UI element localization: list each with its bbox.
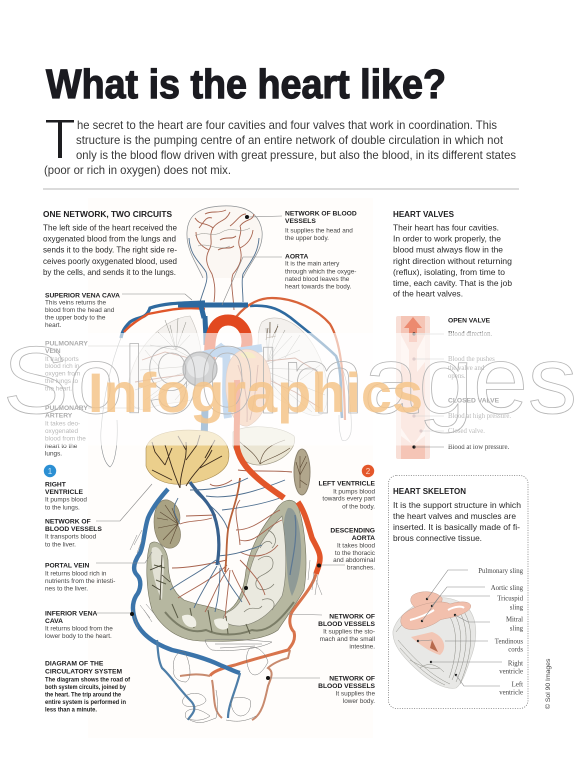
label: diagram of the circulatory system: CIRCULATORY SYSTEM xyxy=(45,668,122,676)
valve labels: OPEN VALVE xyxy=(448,318,491,324)
label: pulmonary vein: the lungs to xyxy=(45,378,78,385)
label: superior vena cava: heart. xyxy=(45,322,62,329)
label: network of blood vessels (liver): BLOOD VESSELS xyxy=(45,526,102,533)
label: pulmonary vein: PULMONARY xyxy=(45,340,88,348)
label: pulmonary vein: blood rich in xyxy=(45,363,80,370)
ascending vena cava xyxy=(200,410,205,480)
head vessel network xyxy=(187,206,262,310)
label: network of blood vessels (lower body): It supplies the xyxy=(336,690,375,698)
label: inferior vena cava: lower body to the heart. xyxy=(45,633,112,640)
label: diagram of the circulatory system xyxy=(45,660,131,714)
heart skeleton labels: ventricle xyxy=(499,668,523,676)
label: network of blood vessels (head): the upper body. xyxy=(285,235,329,242)
label: superior vena cava: blood from the head and xyxy=(45,307,115,314)
intro paragraph: structure is the pumping centre of an entire network of double circulation in which not xyxy=(76,133,504,147)
label: pulmonary artery: PULMONARY xyxy=(45,405,88,412)
panel: heart valves: Their heart has four cavities. xyxy=(393,222,499,232)
label: pulmonary artery: heart to the xyxy=(45,443,78,450)
label: right ventricle: VENTRICLE xyxy=(45,489,83,496)
label: diagram of the circulatory system: both system circuits, joined by xyxy=(45,684,126,691)
label: network of blood vessels (intestine): mach and the small xyxy=(320,636,375,643)
heart xyxy=(226,349,271,426)
panel: heart valves: right direction without returning xyxy=(393,256,512,266)
label: one network, two circuits: ONE NETWORK, TWO CIRCUITS xyxy=(43,209,172,219)
label: one network, two circuits: ceives poorly oxygenated blood, used xyxy=(43,256,177,266)
valve labels xyxy=(448,318,511,451)
valve labels: CLOSED VALVE xyxy=(448,398,500,404)
icon: number 2 badge: 2 xyxy=(366,467,371,476)
label: one network, two circuits: sends it to the body. The right side re- xyxy=(43,244,177,254)
label: descending aorta: to the thoracic xyxy=(335,550,376,557)
panel: heart skeleton: HEART SKELETON xyxy=(393,486,466,496)
panel: heart skeleton: the heart valves and muscles are xyxy=(393,511,516,521)
icon: number 1 badge xyxy=(44,465,56,477)
valve labels: Blood at high pressure. xyxy=(448,413,511,420)
label: diagram of the circulatory system: The diagram shows the road of xyxy=(45,676,131,684)
label: one network, two circuits: by the cells, and sends it to the lungs. xyxy=(43,267,176,277)
label: aorta: It is the main artery xyxy=(285,260,340,268)
intro paragraph: only is the blood flow driven with great pressure, but also the blood, in its different states xyxy=(76,148,516,162)
label: portal vein: PORTAL VEIN xyxy=(45,562,90,570)
small intestine loops xyxy=(224,516,286,626)
label: network of blood vessels (head) xyxy=(245,210,357,242)
valve labels: opens. xyxy=(448,373,466,380)
panel: heart valves: (reflux), isolating, from time to xyxy=(393,267,505,277)
label: left ventricle: of the body. xyxy=(342,504,375,510)
label: network of blood vessels (intestine): BLOOD VESSELS xyxy=(318,621,376,628)
label: network of blood vessels (intestine): It supplies the sto- xyxy=(323,628,375,636)
label: diagram of the circulatory system: less than a minute. xyxy=(45,706,97,714)
label: network of blood vessels (lower body): BLOOD VESSELS xyxy=(318,683,376,690)
superior vena cava and subclavian veins xyxy=(178,302,248,345)
label: descending aorta: AORTA xyxy=(352,535,375,542)
panel: heart valves: In order to work properly, the xyxy=(393,234,501,244)
mesenteric vessels xyxy=(170,470,292,618)
label: aorta: heart towards the body. xyxy=(285,284,352,290)
label: pulmonary artery: It takes deo- xyxy=(45,420,80,428)
label: left ventricle: towards every part xyxy=(322,496,375,502)
grey sphere: right atrium xyxy=(183,352,217,386)
label: descending aorta xyxy=(317,528,376,572)
heart skeleton drawing xyxy=(393,570,502,688)
label: superior vena cava: the upper body to the xyxy=(45,314,106,322)
label: aorta: through which the oxyge- xyxy=(285,268,356,276)
label: pulmonary vein: It transports xyxy=(45,356,79,363)
descending aorta xyxy=(237,380,284,498)
label: superior vena cava xyxy=(45,292,192,329)
heart skeleton labels: sling xyxy=(510,626,524,632)
kidney xyxy=(154,500,180,548)
label: right ventricle xyxy=(45,482,87,512)
valve labels: Blood at low pressure. xyxy=(448,444,509,451)
label: network of blood vessels (liver): It transports blood xyxy=(45,534,97,540)
icon: number 1 badge: 1 xyxy=(48,467,53,476)
heart skeleton labels: ventricle xyxy=(499,690,523,696)
label: network of blood vessels (intestine) xyxy=(244,586,376,650)
left lung xyxy=(128,316,205,410)
label: portal vein: nes to the liver. xyxy=(45,586,88,592)
icon: number 2 badge xyxy=(362,465,374,477)
arm vessels and hands xyxy=(101,298,351,467)
heart skeleton labels: Right xyxy=(508,660,523,668)
label: aorta: AORTA xyxy=(285,254,308,260)
label: network of blood vessels (lower body): NETWORK OF xyxy=(329,676,375,682)
panel: heart valves: blood must always flow in the xyxy=(393,244,503,254)
label: descending aorta: DESCENDING xyxy=(330,528,375,534)
valve labels: Blood direction. xyxy=(448,331,492,338)
label: network of blood vessels (lower body) xyxy=(266,676,376,705)
label: pulmonary vein xyxy=(45,340,170,392)
panel: heart valves: of the heart valves. xyxy=(393,288,463,298)
heart skeleton labels: Tricuspid xyxy=(497,596,524,602)
descending colon shading xyxy=(284,508,301,596)
heart skeleton labels: Tendinous xyxy=(495,638,523,646)
label: inferior vena cava: CAVA xyxy=(45,618,63,625)
label: network of blood vessels (head): NETWORK OF BLOOD xyxy=(285,210,357,218)
aortic arch xyxy=(210,320,247,380)
label: left ventricle xyxy=(319,480,376,510)
colon folds xyxy=(165,602,294,634)
watermark: orange wordmark: Infographics xyxy=(88,361,423,424)
label: network of blood vessels (liver): NETWORK OF xyxy=(45,518,91,526)
label: pulmonary vein: VEIN xyxy=(45,348,61,355)
label: descending aorta: It takes blood xyxy=(337,542,375,550)
label: pulmonary artery: lungs. xyxy=(45,450,62,458)
label: pulmonary artery: oxygenated xyxy=(45,428,78,435)
heart skeleton labels: Left xyxy=(512,682,523,688)
label: one network, two circuits: oxygenated blood from the lungs and xyxy=(43,234,176,244)
panel: heart skeleton: It is the support structure in which xyxy=(393,500,521,510)
intro paragraph xyxy=(44,118,516,177)
label: aorta xyxy=(222,254,356,305)
panel: heart valves: time, each cavity. That is the job xyxy=(393,278,512,288)
heart skeleton labels: cords xyxy=(508,646,523,654)
stomach xyxy=(233,427,295,465)
label: right ventricle: RIGHT xyxy=(45,482,67,488)
label: diagram of the circulatory system: the heart. The trip around the xyxy=(45,692,121,698)
circulatory system illustration xyxy=(101,206,351,723)
label: right ventricle: to the lungs. xyxy=(45,504,80,512)
limb branches xyxy=(130,530,322,628)
heart skeleton labels xyxy=(478,568,524,696)
panel: heart valves xyxy=(393,209,512,459)
label: network of blood vessels (head): VESSELS xyxy=(285,218,316,225)
heart skeleton labels: Aortic sling xyxy=(491,585,524,592)
label: network of blood vessels (head): It supplies the head and xyxy=(285,228,353,234)
valve labels: Closed valve. xyxy=(448,428,485,435)
valve labels: the valve and xyxy=(448,365,485,372)
label: network of blood vessels (intestine): NETWORK OF xyxy=(329,614,375,620)
heart skeleton labels: Mitral xyxy=(506,616,523,624)
label: left ventricle: It pumps blood xyxy=(333,488,375,496)
label: diagram of the circulatory system: DIAGRAM OF THE xyxy=(45,660,104,668)
label: one network, two circuits: The left side of the heart received the xyxy=(43,222,177,232)
intestines xyxy=(147,500,306,641)
label: aorta: nated blood leaves the xyxy=(285,276,350,283)
drop cap xyxy=(46,120,74,158)
label: diagram of the circulatory system: entire system is performed in xyxy=(45,699,126,706)
label: left ventricle: LEFT VENTRICLE xyxy=(319,480,376,488)
right lung xyxy=(258,318,328,416)
label: pulmonary artery xyxy=(45,405,140,458)
label: portal vein xyxy=(45,552,152,592)
label: inferior vena cava xyxy=(45,610,134,640)
title: What is the heart like? xyxy=(46,61,446,107)
label: pulmonary vein: oxygen from xyxy=(45,370,80,378)
liver xyxy=(146,430,229,488)
panel: heart skeleton: inserted. It is basically made of fi- xyxy=(393,522,520,532)
label: network of blood vessels (lower body): lower body. xyxy=(343,698,375,705)
label: inferior vena cava: INFERIOR VENA xyxy=(45,610,98,618)
label: superior vena cava: SUPERIOR VENA CAVA xyxy=(45,292,120,300)
panel: heart skeleton xyxy=(388,476,528,708)
intro paragraph: (poor or rich in oxygen) does not mix. xyxy=(44,163,231,177)
label: descending aorta: and abdominal xyxy=(333,557,375,564)
label: pulmonary artery: blood from the xyxy=(45,436,86,442)
label: descending aorta: branches. xyxy=(347,564,375,572)
label: pulmonary vein: the heart. xyxy=(45,386,72,392)
heart skeleton labels: sling xyxy=(510,604,524,612)
label: portal vein: nutrients from the intesti- xyxy=(45,578,115,585)
label: inferior vena cava: It returns blood from the xyxy=(45,626,113,632)
label: network of blood vessels (liver) xyxy=(45,484,152,548)
heart skeleton labels: Pulmonary sling xyxy=(478,568,524,575)
ascending colon highlight xyxy=(151,547,164,600)
label: superior vena cava: This veins returns the xyxy=(45,300,107,306)
pulmonary trunk xyxy=(195,345,262,418)
label: one network, two circuits xyxy=(43,209,177,277)
valve labels: Blood the pushes xyxy=(448,356,495,363)
panel: heart skeleton: brous connective tissue. xyxy=(393,533,482,543)
watermark band xyxy=(0,333,581,446)
pelvic and leg vessel network xyxy=(173,639,272,723)
intro paragraph: he secret to the heart are four cavities and four valves that work in coordination. This xyxy=(77,118,497,132)
label: right ventricle: It pumps blood xyxy=(45,496,87,504)
inferior vena cava xyxy=(133,489,240,673)
credit: © Sol 90 Images xyxy=(544,658,552,709)
label: pulmonary artery: ARTERY xyxy=(45,412,73,420)
watermark: outlined wordmark: Sol90Images xyxy=(3,327,577,434)
panel: heart valves: HEART VALVES xyxy=(393,209,454,219)
spleen xyxy=(294,449,310,495)
label: portal vein: It returns blood rich in xyxy=(45,570,107,578)
label: network of blood vessels (intestine): intestine. xyxy=(349,644,375,650)
valve diagram xyxy=(396,316,444,459)
label: network of blood vessels (liver): to the liver. xyxy=(45,542,76,548)
